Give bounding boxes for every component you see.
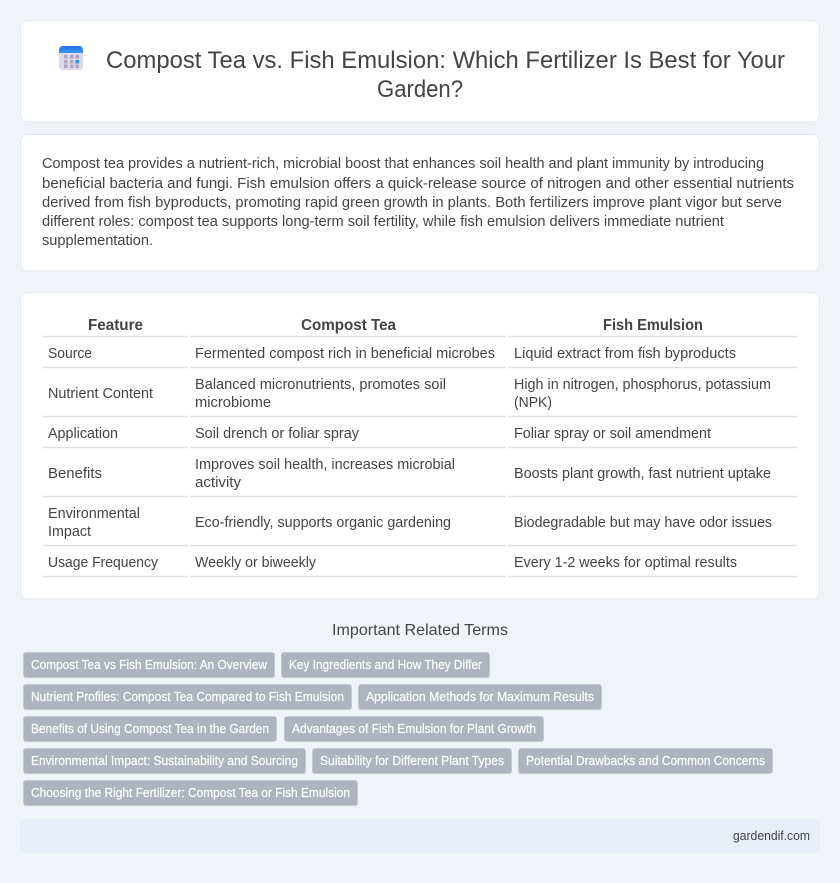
tag: advantages (284, 716, 544, 742)
row: source: Source (48, 346, 92, 362)
row: environmental impact: Eco-friendly, supports organic gardening (195, 515, 451, 531)
row: nutrient content (48, 377, 771, 411)
tag: key ingredients (282, 652, 490, 678)
row: usage frequency (48, 555, 737, 571)
tag: key ingredients: Key Ingredients and How They Differ (289, 658, 482, 672)
tag: nutrient profiles (24, 684, 352, 710)
text block: summary paragraph: derived from fish byproducts, promoting rapid green growth in plants. Both fertilizers improve plant vigor but serve (42, 195, 782, 211)
row: nutrient content: Balanced micronutrients, promotes soil (195, 377, 446, 393)
row: source: Fermented compost rich in beneficial microbes (195, 346, 495, 362)
row: environmental impact: Biodegradable but may have odor issues (514, 515, 772, 531)
table header row: Feature (88, 317, 143, 334)
panel: header (20, 20, 820, 122)
text block: summary paragraph: supplementation. (42, 233, 153, 249)
heading: important related terms: Important Related Terms (332, 622, 508, 639)
row: environmental impact (48, 506, 772, 540)
tag: choosing (24, 780, 358, 806)
tag: overview: Compost Tea vs Fish Emulsion: An Overview (31, 658, 268, 672)
text block: summary paragraph: Compost tea provides a nutrient-rich, microbial boost that enhances soil health and plant immunity by introducing (42, 156, 764, 172)
tag: benefits: Benefits of Using Compost Tea in the Garden (31, 722, 269, 736)
row: application: Application (48, 426, 118, 442)
row: application: Foliar spray or soil amendment (514, 426, 711, 442)
row: benefits: Improves soil health, increases microbial (195, 457, 455, 473)
table header row (88, 317, 703, 334)
panel: introduction (20, 134, 820, 271)
panel: related term tags (24, 652, 772, 806)
tag: benefits (24, 716, 276, 742)
row: nutrient content: Nutrient Content (48, 386, 153, 402)
row: application (48, 426, 711, 442)
tag: choosing: Choosing the Right Fertilizer: Compost Tea or Fish Emulsion (31, 786, 350, 800)
row: environmental impact: Impact (48, 524, 91, 540)
text block: summary paragraph (42, 156, 794, 249)
tag: advantages: Advantages of Fish Emulsion for Plant Growth (292, 722, 536, 736)
row: usage frequency: Usage Frequency (48, 555, 159, 571)
tag: drawbacks: Potential Drawbacks and Common Concerns (526, 754, 765, 768)
row: benefits (48, 457, 771, 491)
tag: nutrient profiles: Nutrient Profiles: Compost Tea Compared to Fish Emulsion (31, 690, 344, 704)
row: environmental impact: Environmental (48, 506, 140, 522)
table header row: Fish Emulsion (603, 317, 703, 334)
title: Garden? (377, 76, 463, 103)
title (106, 47, 785, 103)
row: nutrient content: microbiome (195, 395, 271, 411)
text block: summary paragraph: beneficial bacteria and fungi. Fish emulsion offers a quick-release source of nitrogen and other essential nutrients (42, 176, 794, 192)
tag: environmental impact (24, 748, 306, 774)
panel: comparison table (20, 292, 820, 599)
footer: gardendif.com (733, 829, 810, 843)
row: nutrient content: (NPK) (514, 395, 552, 411)
row: benefits: Benefits (48, 466, 102, 482)
row: application: Soil drench or foliar spray (195, 426, 360, 442)
row: usage frequency: Weekly or biweekly (195, 555, 317, 571)
row: nutrient content: High in nitrogen, phosphorus, potassium (514, 377, 771, 393)
tag: suitability: Suitability for Different Plant Types (320, 754, 504, 768)
title: Compost Tea vs. Fish Emulsion: Which Fertilizer Is Best for Your (106, 47, 785, 74)
tag: drawbacks (518, 748, 772, 774)
footer (20, 819, 820, 853)
tag: application methods: Application Methods for Maximum Results (366, 690, 594, 704)
row: benefits: Boosts plant growth, fast nutrient uptake (514, 466, 771, 482)
tag: environmental impact: Environmental Impact: Sustainability and Sourcing (31, 754, 298, 768)
table header row: Compost Tea (301, 317, 396, 334)
tag: suitability (312, 748, 512, 774)
row: usage frequency: Every 1-2 weeks for optimal results (514, 555, 737, 571)
row: source: Liquid extract from fish byproducts (514, 346, 736, 362)
text block: summary paragraph: different roles: compost tea supports long-term soil fertility, while fish emulsion delivers immediate nutrient (42, 214, 724, 230)
tag: application methods (358, 684, 602, 710)
icon: calendar (59, 46, 83, 70)
tag: overview (24, 652, 274, 678)
row: source (48, 346, 736, 362)
row: benefits: activity (195, 475, 242, 491)
